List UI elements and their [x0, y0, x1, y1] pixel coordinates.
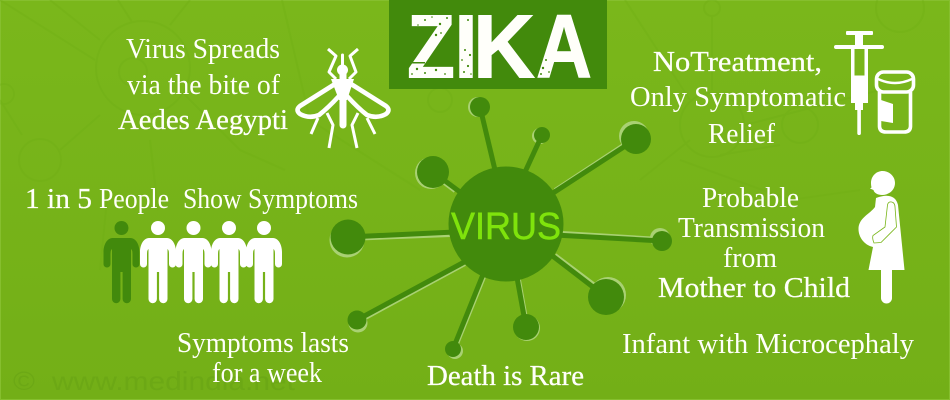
text: microcephaly: Infant with Microcephaly — [622, 329, 914, 360]
person 5 — [246, 221, 282, 303]
person 2 — [140, 221, 176, 303]
person: highlighted — [104, 221, 140, 303]
text: virus spreads: via the bite of — [127, 70, 281, 101]
text: no treatment: Relief — [708, 119, 776, 150]
text: 1 in 5 people show symptoms: People — [99, 184, 169, 215]
watermark: © — [13, 366, 35, 396]
icon: mosquito — [298, 49, 388, 148]
text: symptoms duration: Symptoms lasts — [177, 328, 349, 359]
person 4 — [211, 221, 247, 303]
text: virus spreads: Aedes Aegypti — [118, 105, 288, 136]
spikes: highlight layer — [330, 97, 670, 359]
text: symptoms duration: for a week — [212, 358, 322, 389]
title banner: A — [536, 0, 592, 98]
title banner: Z — [407, 0, 455, 98]
icon: syringe — [834, 31, 884, 135]
text: 1 in 5 people show symptoms: 1 in 5 — [25, 184, 92, 215]
text: transmission: from — [723, 243, 777, 274]
text: transmission: Probable — [702, 183, 799, 214]
title banner: K — [473, 0, 535, 98]
watermark: www.medindia.net — [51, 366, 296, 396]
icon: medicine bottle — [876, 72, 914, 132]
text: virus spreads: Virus Spreads — [126, 34, 280, 65]
icon: pregnant woman — [858, 171, 904, 304]
text: virus spreads — [118, 34, 288, 136]
text: transmission — [658, 183, 850, 304]
spikes: dark layer — [330, 97, 672, 357]
text: no treatment: NoTreatment, — [653, 47, 822, 78]
title banner: I — [454, 0, 478, 98]
person 3 — [176, 221, 212, 303]
text: 1 in 5 people show symptoms: Show Symptoms — [183, 184, 358, 215]
text: symptoms duration — [177, 328, 349, 389]
text: no treatment — [630, 47, 846, 150]
title banner — [389, 0, 607, 98]
text: no treatment: Only Symptomatic — [630, 82, 846, 113]
virus core — [448, 166, 564, 282]
text: transmission: Mother to Child — [658, 273, 850, 304]
icon: five people — [104, 221, 282, 303]
virus label: VIRUS — [451, 206, 561, 248]
text: 1 in 5 people show symptoms — [25, 184, 358, 215]
virus graphic — [330, 97, 672, 359]
text: death is rare: Death is Rare — [427, 361, 584, 392]
text: transmission: Transmission — [678, 213, 825, 244]
